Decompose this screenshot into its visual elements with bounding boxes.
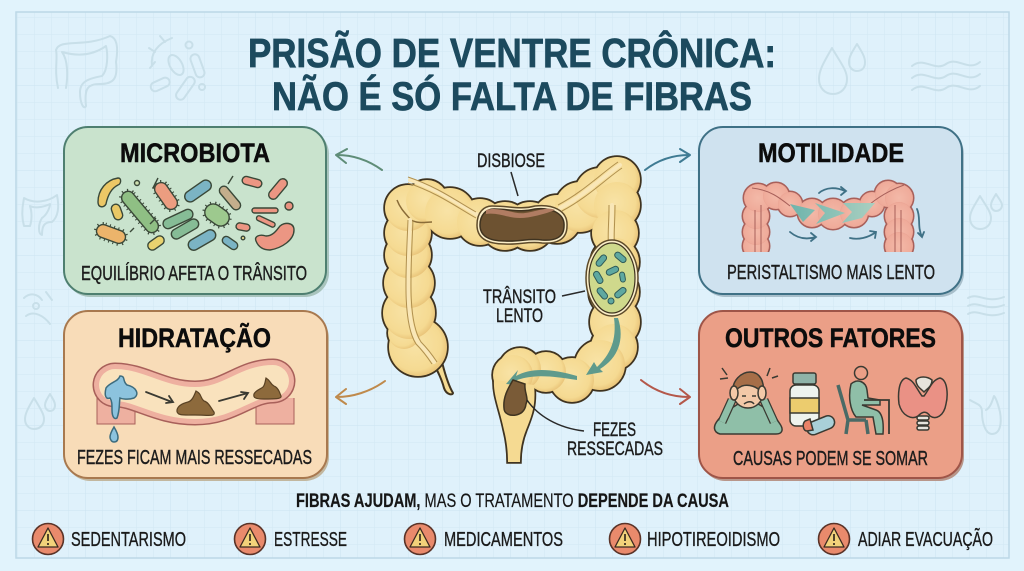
taenia bands bbox=[408, 165, 620, 362]
arrow: to microbiota bbox=[336, 149, 382, 170]
colon outline and body bbox=[383, 157, 640, 462]
central colon illustration bbox=[383, 157, 640, 462]
background icon: drops top right bbox=[819, 44, 865, 94]
label: transito lento: TRÂNSITO bbox=[483, 286, 556, 308]
icon: bacteria group bbox=[95, 176, 294, 252]
panel: motilidade bbox=[699, 127, 964, 297]
stool in transverse colon bbox=[477, 206, 567, 244]
label: outros fatores caption: CAUSAS PODEM SE SOMAR bbox=[733, 448, 928, 470]
background icon: colon bbox=[56, 36, 117, 107]
label: disbiose: DISBIOSE bbox=[477, 151, 545, 172]
heading: motilidade: MOTILIDADE bbox=[758, 138, 904, 168]
icon: medicine bottle and pill bbox=[790, 373, 837, 437]
label: microbiota caption: EQUILÍBRIO AFETA O TRÂNSITO bbox=[81, 262, 307, 285]
warning: hipotireoidismo bbox=[610, 524, 780, 554]
label: fezes ressecadas bbox=[527, 400, 663, 460]
label: fezes ressecadas: RESSECADAS bbox=[567, 439, 663, 460]
green transit arrow bbox=[506, 318, 621, 385]
green dysbiosis pocket bbox=[586, 240, 638, 316]
background icon: waves right bbox=[968, 296, 1004, 315]
label: transito lento bbox=[483, 286, 585, 327]
warning: medicamentos: MEDICAMENTOS bbox=[444, 529, 563, 551]
heading: hidratacao: HIDRATAÇÃO bbox=[118, 322, 271, 353]
label: hidratacao caption: FEZES FICAM MAIS RESSECADAS bbox=[77, 447, 312, 469]
arrow: to motilidade bbox=[645, 149, 690, 170]
panel: hidratacao bbox=[64, 311, 329, 481]
icon: colon with water and stool bbox=[97, 376, 294, 442]
background icon: drops right bbox=[970, 194, 1002, 229]
warning: adiar evacuacao bbox=[818, 524, 993, 554]
heading: microbiota: MICROBIOTA bbox=[120, 138, 270, 168]
warning: medicamentos bbox=[404, 524, 563, 554]
label: transito lento: LENTO bbox=[496, 306, 543, 327]
title: PRISÃO DE VENTRE CRÔNICA: bbox=[248, 30, 776, 76]
takeaway line: FIBRAS AJUDAM, MAS O TRATAMENTO DEPENDE DA CAUSA bbox=[296, 491, 729, 512]
icon: sedentary seated person bbox=[838, 366, 889, 434]
icon: thyroid bbox=[899, 377, 947, 430]
label: disbiose bbox=[477, 151, 545, 196]
title bbox=[248, 30, 776, 119]
background icon: water hand right bbox=[970, 396, 1001, 434]
label: motilidade caption: PERISTALTISMO MAIS LENTO bbox=[727, 262, 935, 284]
warning: sedentarismo: SEDENTARISMO bbox=[71, 529, 186, 551]
warning: estresse bbox=[234, 524, 347, 554]
background icon: bacteria left bbox=[24, 292, 52, 324]
background icon: small colon left bbox=[22, 195, 58, 235]
warning: hipotireoidismo: HIPOTIREOIDISMO bbox=[647, 529, 780, 551]
background icon: waves top right bbox=[912, 62, 980, 90]
label: fezes ressecadas: FEZES bbox=[593, 420, 636, 441]
panel: outros fatores bbox=[699, 311, 964, 481]
arrow: to hidratacao bbox=[336, 381, 385, 404]
warning: sedentarismo bbox=[32, 524, 186, 554]
title: NÃO É SÓ FALTA DE FIBRAS bbox=[272, 73, 752, 119]
icon: slow colon peristalsis bbox=[738, 181, 924, 264]
icon: stressed person bbox=[714, 368, 782, 434]
arrow: to outros fatores bbox=[641, 380, 690, 404]
warning: estresse: ESTRESSE bbox=[274, 529, 347, 551]
background icon: drops left bbox=[25, 394, 55, 429]
heading: outros fatores: OUTROS FATORES bbox=[725, 323, 936, 353]
panel: microbiota bbox=[64, 127, 329, 297]
dry stool in rectum bbox=[504, 380, 527, 415]
background icon: bacteria bbox=[149, 36, 206, 102]
